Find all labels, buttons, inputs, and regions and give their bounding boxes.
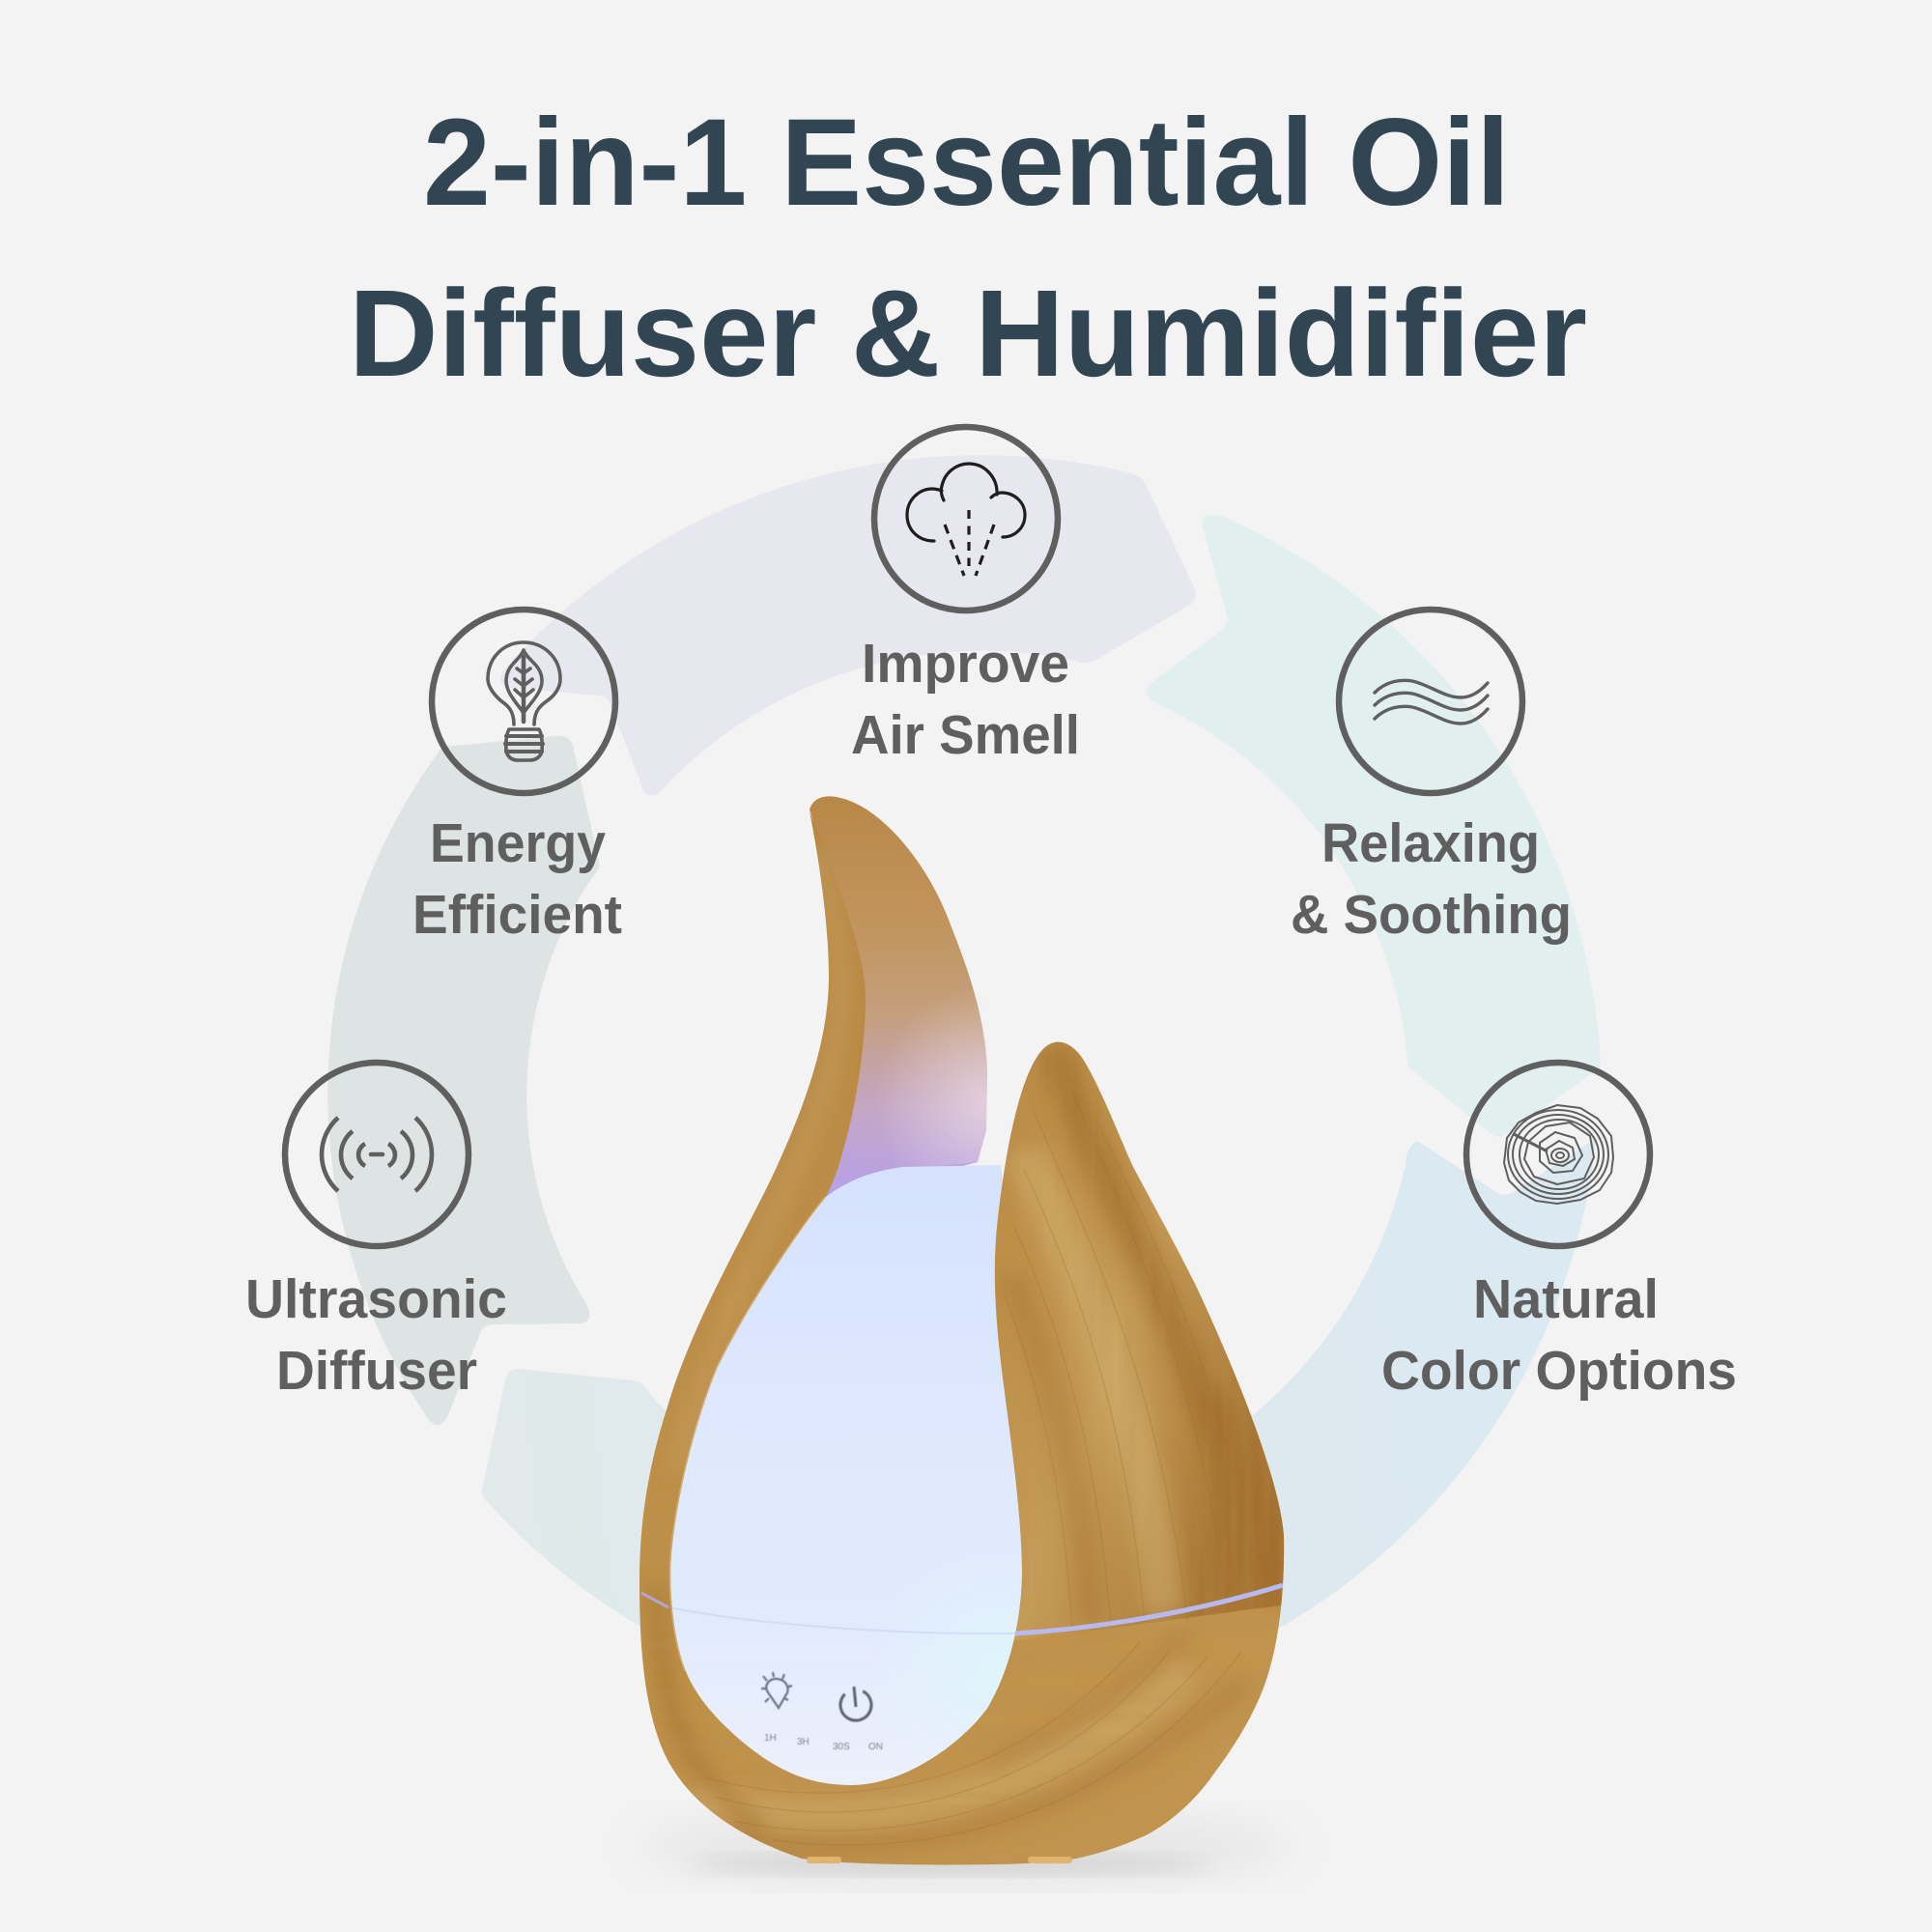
icon circle: [1339, 610, 1522, 793]
icon: ultrasonic waves: [322, 1118, 432, 1191]
label line 2: Diffuser: [276, 1340, 477, 1402]
label line 2: Air Smell: [851, 704, 1080, 766]
icon circle: [285, 1063, 469, 1246]
procedural grain texture: upper flame: [696, 879, 1250, 1565]
icon circle: [1466, 1063, 1650, 1246]
icon circle: [874, 427, 1058, 611]
feature: Improve Air Smell: [851, 427, 1080, 766]
label: Energy: [430, 812, 606, 874]
white glowing water tank: [657, 1165, 1121, 1806]
label: Relaxing: [1321, 812, 1540, 874]
control labels: 30S: [833, 1742, 850, 1752]
title line 1: 2-in-1 Essential Oil: [423, 94, 1510, 232]
icon circle: [432, 610, 615, 793]
circular arrows ring: [327, 455, 1601, 1713]
feature: Ultrasonic Diffuser: [245, 1063, 507, 1402]
label line 2: Color Options: [1381, 1340, 1737, 1402]
control labels: 1H: [764, 1733, 777, 1744]
label: Natural: [1473, 1268, 1659, 1330]
control icon: bulb: [761, 1672, 792, 1708]
label line 2: Efficient: [412, 884, 622, 946]
feature: Energy Efficient: [412, 610, 622, 946]
control labels: 3H: [797, 1737, 810, 1747]
procedural grain texture: lower bowl: [641, 1641, 1267, 1860]
feature: Relaxing & Soothing: [1291, 610, 1572, 946]
label: Improve: [862, 633, 1069, 695]
arrow: grey left segment: [327, 736, 599, 1425]
feature: Natural Color Options: [1381, 1063, 1737, 1402]
window edge highlight: [670, 1197, 826, 1671]
control labels: ON: [868, 1742, 883, 1752]
icon: wood tree rings: [1504, 1105, 1613, 1204]
right panel tone: [1013, 1156, 1285, 1640]
fine wood grain lines: [705, 1092, 1256, 1845]
product photo: wood flame diffuser: [618, 792, 1294, 1886]
icon: leaf light bulb: [488, 642, 560, 760]
feet: [807, 1857, 1072, 1863]
light seam: [641, 1585, 1283, 1634]
wood shell: [618, 792, 1294, 1869]
icon: steam cloud: [907, 464, 1025, 576]
arrow: pale blue bottom segment: [482, 1138, 1596, 1713]
control labels: [764, 1733, 883, 1752]
broad wood grain bands: [657, 850, 1280, 1845]
arrow: purple top segment: [500, 455, 1196, 795]
arrow: teal right segment: [1147, 514, 1601, 1137]
control icon: power: [835, 1684, 877, 1726]
title: [349, 94, 1587, 403]
label: Ultrasonic: [245, 1268, 507, 1330]
label line 2: & Soothing: [1291, 884, 1572, 946]
title line 2: Diffuser & Humidifier: [349, 265, 1587, 403]
back wood fin: [810, 796, 987, 1203]
icon: air waves: [1375, 680, 1488, 724]
floor shadow: [638, 1808, 1294, 1886]
